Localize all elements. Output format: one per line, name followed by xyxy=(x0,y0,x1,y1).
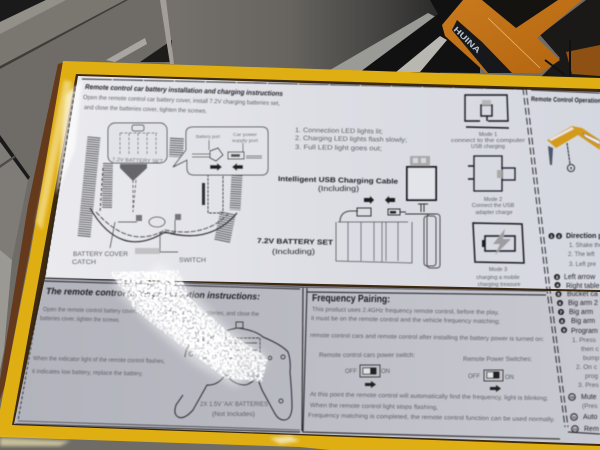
paper: upper panel xyxy=(45,76,600,290)
panel frame lines xyxy=(15,79,600,439)
text: frequency pairing intro: it must be on the remote control and the vehicle frequency matching; xyxy=(311,316,500,325)
text: remote battery steps xyxy=(32,307,260,378)
label: battery cover catch: BATTERY COVER xyxy=(73,252,129,258)
list: remote control functions: Program xyxy=(571,328,598,335)
list: remote control functions: 5 xyxy=(557,292,560,296)
list: remote control functions: Big arm xyxy=(571,318,595,325)
text: frequency pairing outcome: Frequency matching is completed, the remote control function can be used normally. xyxy=(308,413,555,423)
list: remote control functions: 3 xyxy=(556,274,559,280)
text: LED status list: 2. Charging LED lights flash slowly; xyxy=(295,135,407,144)
text: LED status list: 1. Connection LED lights lit; xyxy=(295,127,383,136)
glare on left edge of paper and frame xyxy=(36,80,82,230)
diagram: excavator arm: 5 xyxy=(570,166,573,170)
text: mode 2: Connect the USB xyxy=(472,203,515,209)
list: remote control functions: Mute xyxy=(581,394,597,401)
diagram: remote power switch: OFF xyxy=(468,374,480,380)
label: USB charging cable xyxy=(278,176,398,193)
text: frequency pairing intro: This product uses 2.4GHz frequency remote control, before the play, xyxy=(312,307,499,316)
text: mode 3 xyxy=(476,267,520,288)
list: remote control functions: 1 xyxy=(550,234,553,238)
text: mode 3: charging a mobile xyxy=(476,275,520,281)
diagram: gamepad remote controller xyxy=(175,322,292,420)
list: remote control functions: 2 xyxy=(558,234,561,238)
text: mode 1: Mode 1 xyxy=(479,132,497,138)
list: remote control functions: 2. The left xyxy=(568,252,595,258)
list: remote control functions: 10 xyxy=(570,394,575,400)
list: remote control functions: 1. Press xyxy=(572,337,597,344)
list: remote control functions xyxy=(548,233,600,433)
toy excavator in background xyxy=(442,0,600,78)
text: remote battery steps: When the indicator light of the remote control flashes, xyxy=(33,356,165,365)
paper: lower left panel xyxy=(14,278,303,434)
text: frequency pairing outcome: When the remote control light stops flashing, xyxy=(310,403,438,411)
diagram: car power switch: ON xyxy=(381,369,390,375)
list: remote control functions: Bucket ca xyxy=(567,291,598,298)
label: switch: SWITCH xyxy=(179,258,206,264)
diagram: car power switch xyxy=(319,353,415,388)
text: LED status list xyxy=(295,127,407,153)
callout: battery pack: 7.2V BATTERY SET xyxy=(112,157,163,165)
brand label: HUINA xyxy=(452,25,483,55)
text: mode 2: Mode 2 xyxy=(484,197,502,203)
text: mode 1: USB charging xyxy=(471,144,505,150)
text: mode 3: charging treasure xyxy=(478,282,520,288)
list: remote control functions: 11 xyxy=(572,414,577,420)
glare on plastic film xyxy=(110,270,268,382)
list: remote control functions: 2. On c xyxy=(576,364,598,371)
diagram: tank top view with battery bay xyxy=(72,123,268,266)
list: remote control functions: prog xyxy=(585,373,598,380)
list: remote control functions: Big arm xyxy=(569,309,593,316)
worn bottom edge of box xyxy=(0,436,300,446)
text: remote battery steps: batteries cover, tighten the screws. xyxy=(40,316,120,324)
callout: battery pack xyxy=(108,123,167,165)
text: frequency pairing outcome xyxy=(308,392,555,423)
diagram: car power switch: OFF xyxy=(345,369,357,375)
label: battery set: (Including) xyxy=(272,249,315,256)
diagram: remote power switch: ON xyxy=(505,375,514,381)
diagram: excavator arm xyxy=(547,126,600,172)
icon: mode 2 adapter xyxy=(468,156,515,191)
list: remote control functions: 4 xyxy=(556,282,559,288)
diagram: USB adapter, cable, battery xyxy=(336,156,440,268)
list: remote control functions: then c xyxy=(581,346,599,353)
arrow: insert battery xyxy=(120,164,147,181)
text: battery installation steps xyxy=(83,95,280,115)
diagram: remote power switch xyxy=(463,357,532,392)
list: remote control functions: Big arm 2 xyxy=(568,300,598,307)
list: remote control functions: Rem xyxy=(584,426,599,433)
text: remote battery steps: Open the remote control battery cover, insert, loose AA, following batteries, and close the xyxy=(43,307,260,318)
list: remote control functions: Right table xyxy=(566,283,600,290)
label: battery cover catch: CATCH xyxy=(72,260,96,266)
text: battery installation steps: Open the remote control car battery cover, install 7.2V charging batteries set, xyxy=(83,95,280,107)
label: battery cover catch xyxy=(72,252,129,266)
text: mode 1 xyxy=(451,132,525,150)
list: remote control functions: 12 xyxy=(573,426,578,432)
diagram: car power switch: Remote control cars power switch: xyxy=(319,353,415,359)
callout: connector detail: Battery port xyxy=(196,134,221,139)
callout: connector detail: supply port xyxy=(232,138,259,143)
text: frequency pairing intro: remote control cars and remote control after installing the battery power is turned on: xyxy=(310,333,544,343)
icon: mode 1 computer xyxy=(465,95,509,128)
text: mode 1: connect to the computer xyxy=(451,138,525,144)
list: remote control functions: 8 xyxy=(561,318,564,324)
text: frequency pairing intro xyxy=(310,307,544,343)
list: remote control functions: Left arrow xyxy=(564,274,596,281)
callout: connector detail xyxy=(173,127,268,175)
text: LED status list: 3. Full LED light goes out; xyxy=(295,144,382,153)
list: remote control functions: (Pres xyxy=(582,403,598,410)
heading: remote battery installation: The remote control battery installation instructions: xyxy=(46,286,260,302)
list: remote control functions: 6 xyxy=(559,300,562,306)
heading: battery installation: Remote control car battery installation and charging instructions xyxy=(85,84,283,98)
label: AA batteries xyxy=(200,402,268,418)
label: battery set: 7.2V BATTERY SET xyxy=(257,238,334,247)
text: remote battery steps: it indicates low battery, replace the battery. xyxy=(32,369,143,378)
list: remote control functions: 3. Left pre xyxy=(569,262,597,268)
paper: lower right panels xyxy=(303,286,600,444)
list: remote control functions: Auto xyxy=(583,414,598,421)
box flap: brown edge xyxy=(0,62,65,400)
label: battery set xyxy=(257,238,334,256)
heading: frequency pairing: Frequency Pairing: xyxy=(312,293,390,305)
text: frequency pairing outcome: At this point the remote control will automatically find the frequency, light is blinking; xyxy=(310,392,548,402)
diagram: remote power switch: Remote Power Switches: xyxy=(463,357,532,363)
list: remote control functions: 3. Pres xyxy=(578,382,599,389)
text: battery installation steps: and close the batteries cover, tighten the screws. xyxy=(84,105,207,115)
text: mode 2 xyxy=(472,197,515,216)
text: mode 2: adapter charge xyxy=(476,210,512,216)
label: AA batteries: 2X 1.5V 'AA' BATTERIES xyxy=(200,402,268,408)
list: remote control functions: 7 xyxy=(560,310,563,314)
label: AA batteries: (Not Includes) xyxy=(212,412,255,418)
label: USB charging cable: Intelligent USB Charging Cable xyxy=(278,176,398,186)
list: remote control functions: 9 xyxy=(563,328,566,332)
text: mode 3: Mode 3 xyxy=(489,267,507,273)
icon: mode 3 charging treasure xyxy=(473,223,524,263)
callout: connector detail: Car power xyxy=(233,132,258,137)
label: USB charging cable: (Including) xyxy=(318,186,359,193)
list: remote control functions: bump xyxy=(583,355,600,362)
